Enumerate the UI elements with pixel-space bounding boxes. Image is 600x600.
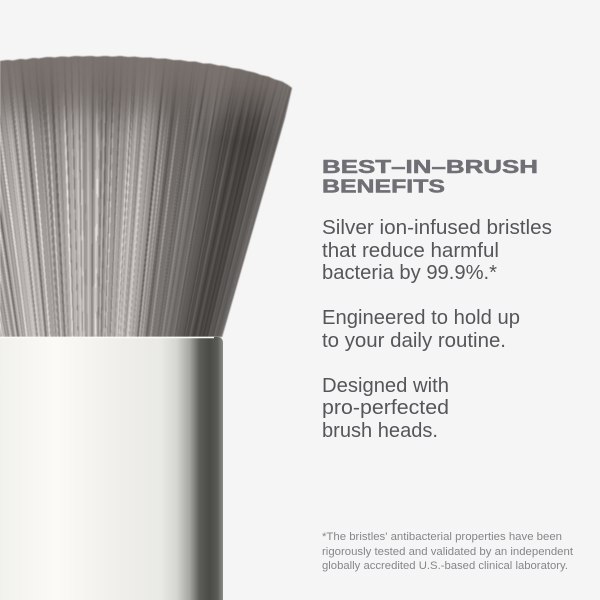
benefit: pro-perfected brush heads: pro-perfected	[322, 397, 449, 419]
benefit: silver ion bristles	[322, 217, 552, 284]
benefit: pro-perfected brush heads	[322, 375, 449, 442]
benefit: daily routine	[322, 307, 520, 352]
benefit: pro-perfected brush heads: brush heads.	[322, 420, 438, 442]
footnote: *The bristles' antibacterial properties have been	[322, 531, 562, 543]
benefit: daily routine: to your daily routine.	[322, 330, 506, 352]
benefit: daily routine: Engineered to hold up	[322, 307, 520, 329]
benefit: silver ion bristles: bacteria by 99.9%.*	[322, 262, 497, 284]
footnote: globally accredited U.S.-based clinical laboratory.	[322, 560, 568, 572]
footnote	[322, 531, 573, 572]
footnote: rigorously tested and validated by an independent	[322, 546, 573, 558]
benefit: pro-perfected brush heads: Designed with	[322, 375, 449, 397]
brush bristles	[0, 55, 293, 338]
heading: BENEFITS	[322, 176, 445, 196]
heading	[322, 157, 538, 196]
brush ferrule handle	[0, 337, 223, 600]
heading: BEST–IN–BRUSH	[322, 157, 538, 177]
benefit: silver ion bristles: Silver ion-infused bristles	[322, 217, 552, 239]
benefit: silver ion bristles: that reduce harmful	[322, 240, 499, 262]
